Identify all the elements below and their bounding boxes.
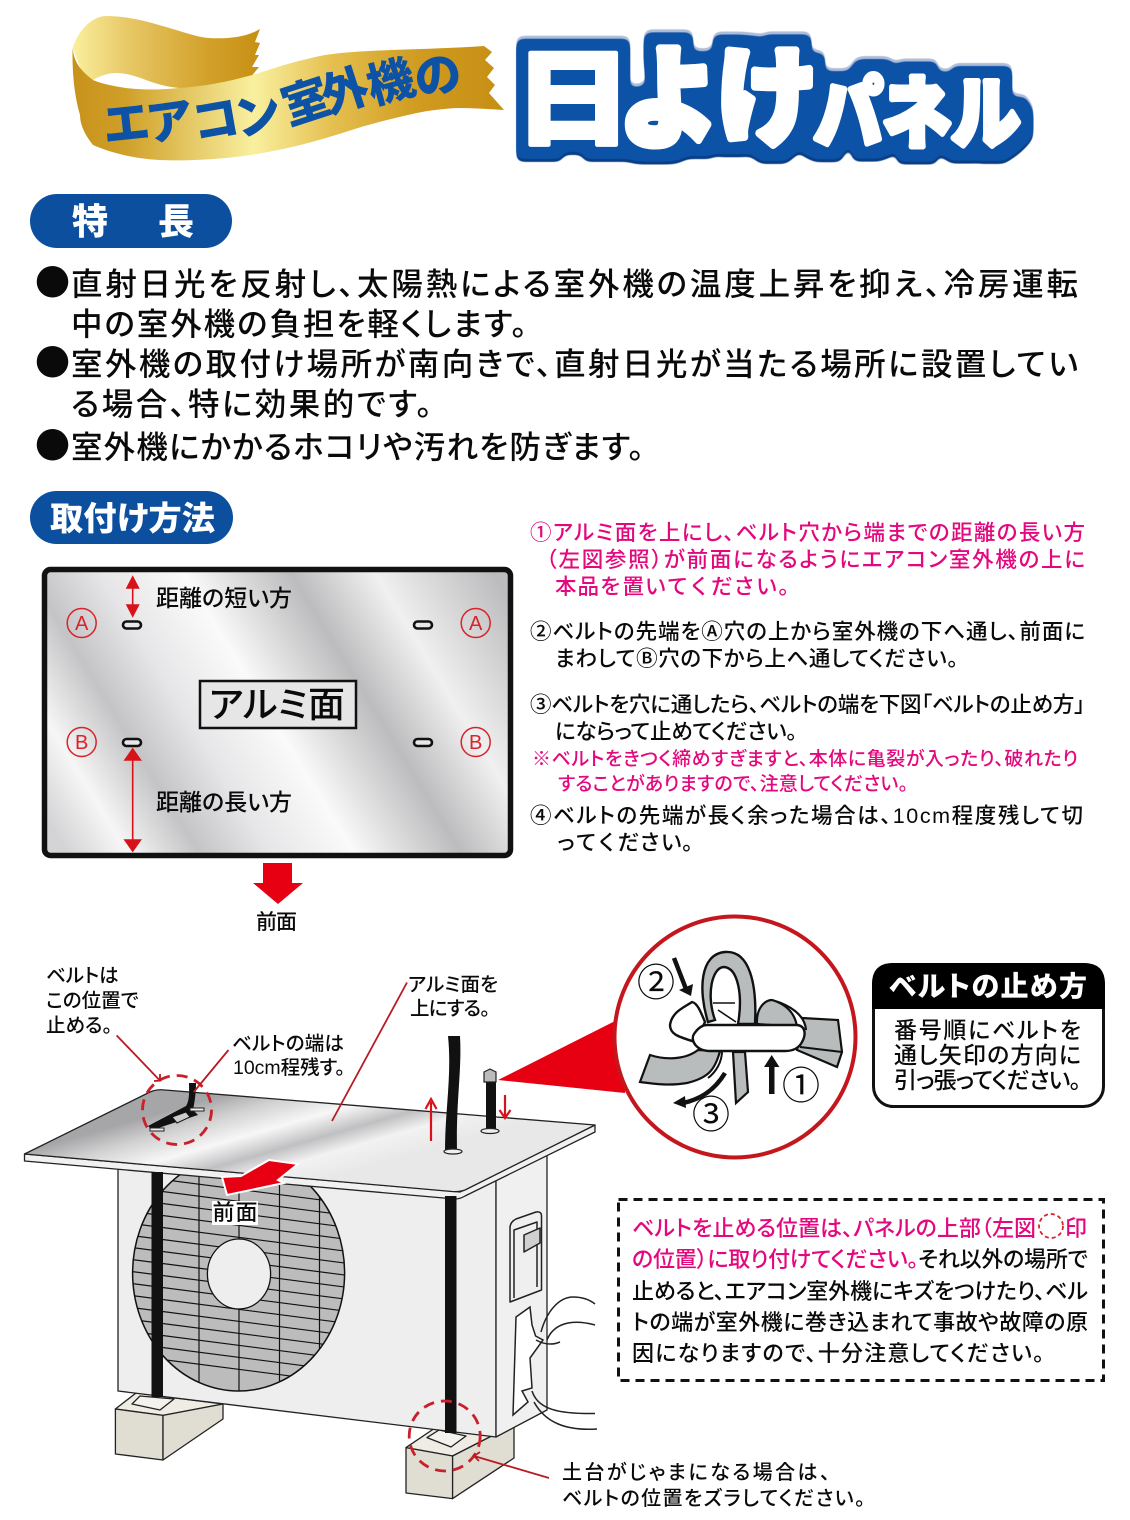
- belt loop: [702, 952, 755, 1024]
- step 1: [530, 521, 1085, 599]
- belt right: [797, 1018, 842, 1067]
- buckle bar: [693, 1025, 805, 1051]
- title banner: ribbon: [72, 16, 504, 160]
- heading: 取付け方法: 取付け方法: [50, 500, 215, 537]
- features text block: 直射日光を反射し、太陽熱による室外機の温度上昇を抑え、冷房運転: [71, 266, 1078, 302]
- header bar: [872, 963, 1105, 1009]
- hole letters: A: [469, 613, 483, 635]
- top panel: [24, 1090, 595, 1199]
- features text block: ●: [35, 418, 70, 469]
- step 1: ①アルミ面を上にし、ベルト穴から端までの距離の長い方: [530, 521, 1085, 545]
- buckle knob: [670, 1002, 705, 1042]
- slots and buckle on plate: [444, 1069, 499, 1154]
- line 4: トの端が室外機に巻き込まれて事故や故障の原: [632, 1310, 1088, 1335]
- label: アルミ面: アルミ面: [209, 684, 345, 725]
- step 3: ③ベルトを穴に通したら、ベルトの端を下図「ベルトの止め方」: [530, 693, 1085, 717]
- illustration: outdoor unit: [24, 965, 865, 1510]
- number 2: ②: [637, 963, 675, 1005]
- short distance arrow: [127, 577, 138, 616]
- fan grille: [132, 1175, 346, 1392]
- belt slots: [123, 622, 432, 746]
- line 1: ベルトを止める位置は、パネルの上部（左図: [632, 1216, 1036, 1241]
- ribbon text: 外: [314, 59, 375, 124]
- panel: aluminium plate diagram: [44, 570, 510, 856]
- title: 日よけパネル: [514, 39, 1020, 162]
- installation steps: [530, 521, 1085, 855]
- hole letters: A: [75, 613, 89, 635]
- front arrow: [222, 1160, 298, 1195]
- number 3: ③: [692, 1095, 730, 1137]
- body text: 引っ張ってください。: [894, 1067, 1081, 1093]
- annotation: belt position: [46, 965, 139, 1037]
- annotation: belt end: [232, 1033, 345, 1079]
- step 3: にならって止めてください。: [555, 720, 797, 744]
- arrow 3: [673, 1073, 725, 1108]
- step 1: （左図参照）が前面になるようにエアコン室外機の上に: [546, 548, 1085, 572]
- callout: dashed warning box: [618, 1200, 1104, 1380]
- header text: ベルトの止め方: [889, 971, 1087, 1002]
- belt tail: [733, 1052, 748, 1103]
- step 4: ④ベルトの先端が長く余った場合は、10cm程度残して切: [530, 803, 1083, 828]
- line 2: の位置）に取り付けてください。それ以外の場所で: [632, 1247, 1088, 1272]
- ribbon back fold: [73, 16, 260, 92]
- ribbon text: 室: [275, 70, 336, 135]
- step 1: 本品を置いてください。: [555, 575, 800, 599]
- concrete block left: [115, 1393, 223, 1460]
- red dashed circle bottom: [409, 1401, 480, 1471]
- down arrow: [500, 1095, 510, 1118]
- up arrow: [426, 1099, 436, 1141]
- arrow 2: [674, 958, 693, 996]
- dashed mark: [1039, 1214, 1063, 1238]
- ribbon text: [101, 45, 466, 152]
- body text: 番号順にベルトを: [894, 1017, 1081, 1043]
- annotation: aluminium side up: アルミ面を: [408, 974, 498, 996]
- annotation: belt position: この位置で: [46, 990, 139, 1012]
- title: 日よけパネル: 日: [514, 43, 632, 159]
- features text block: 中の室外機の負担を軽くします。: [71, 306, 527, 342]
- belts: [152, 1036, 496, 1433]
- annotation: block: ベルトの位置をズラしてください。: [562, 1487, 865, 1510]
- hole markers A and B: [67, 608, 490, 756]
- ribbon front band: [72, 46, 504, 160]
- annotation: belt position: ベルトは: [46, 965, 119, 987]
- belt lower line: [800, 1047, 842, 1052]
- ribbon text: の: [409, 45, 466, 107]
- step 2: ②ベルトの先端をⒶ穴の上から室外機の下へ通し、前面に: [530, 620, 1085, 644]
- features text block: ●: [35, 255, 70, 306]
- number 1: ①: [782, 1066, 820, 1108]
- title: 日よけパネル: よ: [619, 39, 719, 162]
- annotation: belt end: 10cm程残す。: [233, 1057, 345, 1079]
- label: front: 前面: [212, 1200, 258, 1225]
- step 2: まわしてⒷ穴の下から上へ通してください。: [555, 647, 958, 671]
- ribbon text: 機: [361, 50, 420, 114]
- step 4: ってください。: [555, 831, 704, 855]
- zoom cone: [498, 1016, 625, 1093]
- features text block: [35, 255, 1078, 469]
- title: 日よけパネル: け: [717, 41, 817, 159]
- annotation: belt end: ベルトの端は: [232, 1033, 344, 1055]
- ribbon text: ア: [144, 92, 196, 151]
- heading: 特長: 特: [72, 201, 108, 242]
- features text block: 室外機にかかるホコリや汚れを防ぎます。: [71, 429, 644, 465]
- grey lump: [757, 1000, 797, 1027]
- long distance arrow: [125, 749, 140, 851]
- side control box: [510, 1212, 542, 1302]
- caution note: することがありますので、注意してください。: [558, 773, 908, 795]
- title: 日よけパネル: パネル: [814, 70, 1020, 158]
- heading: 特長: 長: [158, 201, 194, 242]
- loop strand: [713, 1003, 736, 1022]
- step 2: [530, 620, 1085, 671]
- ribbon gap: [93, 73, 179, 90]
- arrow 1: [764, 1055, 779, 1094]
- line 3: 止めると、エアコン室外機にキズをつけたり、ベル: [632, 1279, 1088, 1304]
- caution note: [532, 748, 1078, 795]
- caution note: ※ベルトをきつく締めすぎますと、本体に亀裂が入ったり、破れたり: [532, 748, 1078, 770]
- belt strand: [708, 1051, 722, 1078]
- label short: 距離の短い方: [156, 585, 292, 611]
- features text block: る場合、特に効果的です。: [71, 386, 432, 422]
- ribbon text: ン: [231, 84, 285, 146]
- label: 前面: 前面: [256, 911, 297, 934]
- body text: [894, 1017, 1081, 1093]
- side notch and pipes: [513, 1297, 597, 1429]
- fastened belt: [148, 1083, 204, 1131]
- hole letters: B: [75, 732, 88, 754]
- annotation: block: [562, 1461, 865, 1510]
- belt left: [640, 1050, 720, 1085]
- concrete block right: [406, 1425, 514, 1499]
- hole letters: [75, 613, 483, 754]
- annotation: aluminium side up: [408, 974, 498, 1020]
- ribbon text: エ: [101, 95, 152, 152]
- annotation: block: 土台がじゃまになる場合は、: [562, 1461, 830, 1484]
- features text block: 室外機の取付け場所が南向きで、直射日光が当たる場所に設置してい: [71, 346, 1078, 382]
- step 3: [530, 693, 1085, 744]
- zoom circle: belt knot: [614, 916, 856, 1158]
- step 4: [530, 803, 1083, 855]
- hole letters: B: [469, 732, 482, 754]
- label long: 距離の長い方: [156, 789, 292, 815]
- annotation: belt position: 止める。: [46, 1015, 112, 1037]
- ribbon text: コ: [189, 90, 243, 150]
- features text block: ●: [35, 335, 70, 386]
- body text: 通し矢印の方向に: [894, 1042, 1081, 1068]
- arrow: to front: [253, 863, 303, 904]
- red dashed circle top: [142, 1076, 212, 1144]
- line 1 end: 印: [1065, 1216, 1087, 1241]
- heading: 特長: [30, 194, 232, 248]
- heading: 取付け方法: [30, 491, 233, 544]
- right lump outline: [772, 1000, 806, 1030]
- panel: how to fasten the belt: [872, 963, 1105, 1106]
- unit body: [118, 1150, 547, 1437]
- line 5: 因になりますので、十分注意してください。: [632, 1341, 1044, 1366]
- pointer lines: [117, 982, 549, 1478]
- annotation: aluminium side up: 上にする。: [410, 998, 490, 1020]
